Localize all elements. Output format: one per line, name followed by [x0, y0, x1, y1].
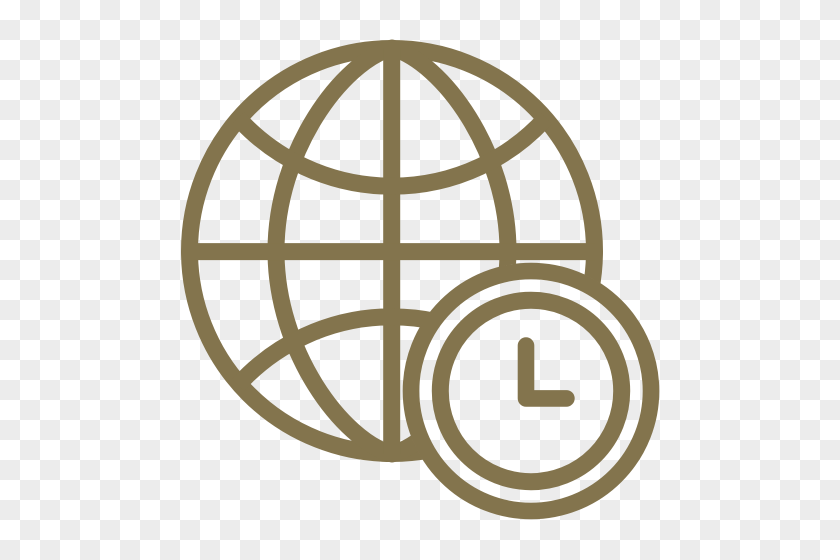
icon: globe: [190, 48, 595, 454]
icon: clock: [403, 263, 659, 519]
